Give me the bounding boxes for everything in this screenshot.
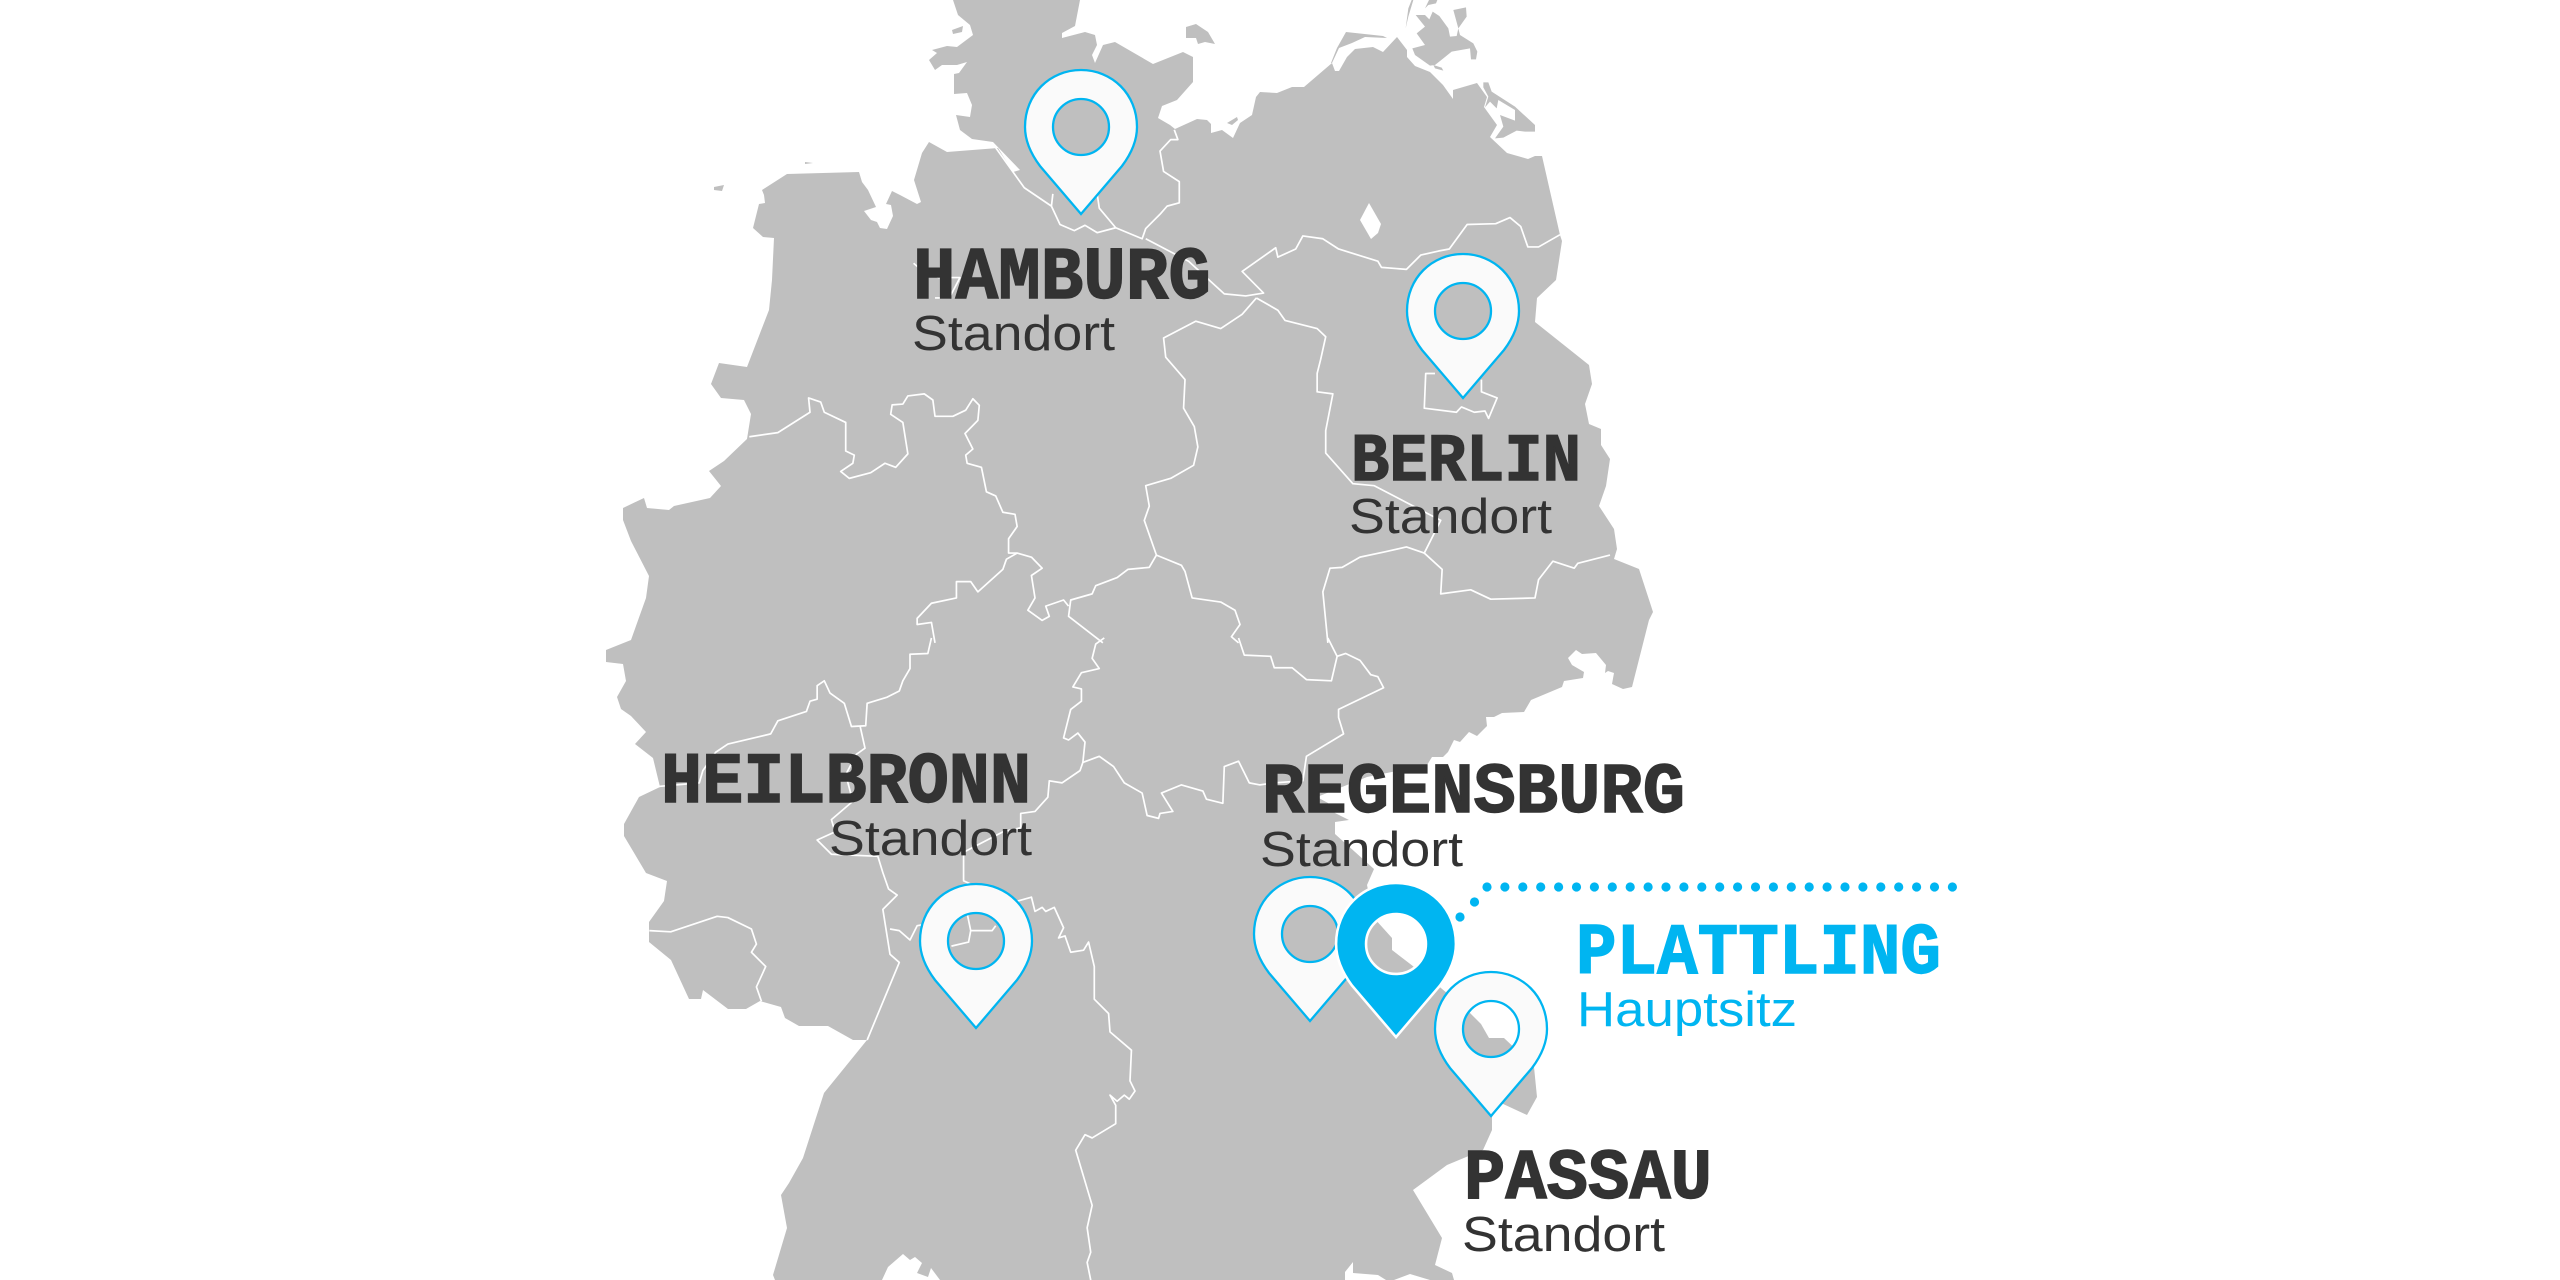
label: Plattling headquarters: PLATTLING	[1576, 913, 1941, 995]
pin: Regensburg	[1254, 877, 1366, 1021]
label: Berlin	[1349, 424, 1581, 544]
label: Regensburg	[1260, 754, 1685, 877]
label: Passau: Standort	[1462, 1208, 1665, 1262]
map: Germany	[606, 0, 1653, 1280]
label: Passau	[1462, 1140, 1712, 1262]
islands: Rügen and Usedom	[1406, 0, 1535, 138]
label: Hamburg	[912, 237, 1211, 361]
label: Regensburg: REGENSBURG	[1262, 754, 1685, 834]
label: Berlin: Standort	[1349, 490, 1552, 544]
label: Passau: PASSAU	[1464, 1140, 1712, 1220]
pin: Plattling headquarters	[1336, 883, 1456, 1037]
pin: Heilbronn	[920, 884, 1032, 1028]
pin: Passau	[1435, 972, 1547, 1116]
label: Plattling headquarters: Hauptsitz	[1577, 983, 1797, 1037]
pin: Berlin	[1407, 254, 1519, 398]
state borders: north	[749, 130, 1610, 643]
state borders: south	[649, 638, 1384, 1280]
dotted connector line	[1455, 887, 1953, 922]
label: Regensburg: Standort	[1260, 823, 1463, 877]
label: Berlin: BERLIN	[1351, 424, 1581, 501]
label: Plattling headquarters	[1576, 913, 1941, 1037]
map: mainland	[606, 0, 1653, 1280]
lake: Müritz	[1360, 203, 1381, 239]
label: Heilbronn: Standort	[829, 812, 1032, 866]
label: Heilbronn: HEILBRONN	[661, 742, 1031, 824]
pin: Hamburg	[1025, 70, 1137, 214]
label: Heilbronn	[661, 742, 1032, 866]
label: Hamburg: Standort	[912, 307, 1115, 361]
label: Hamburg: HAMBURG	[913, 237, 1211, 321]
islands: Baltic and North Sea	[714, 24, 1387, 191]
